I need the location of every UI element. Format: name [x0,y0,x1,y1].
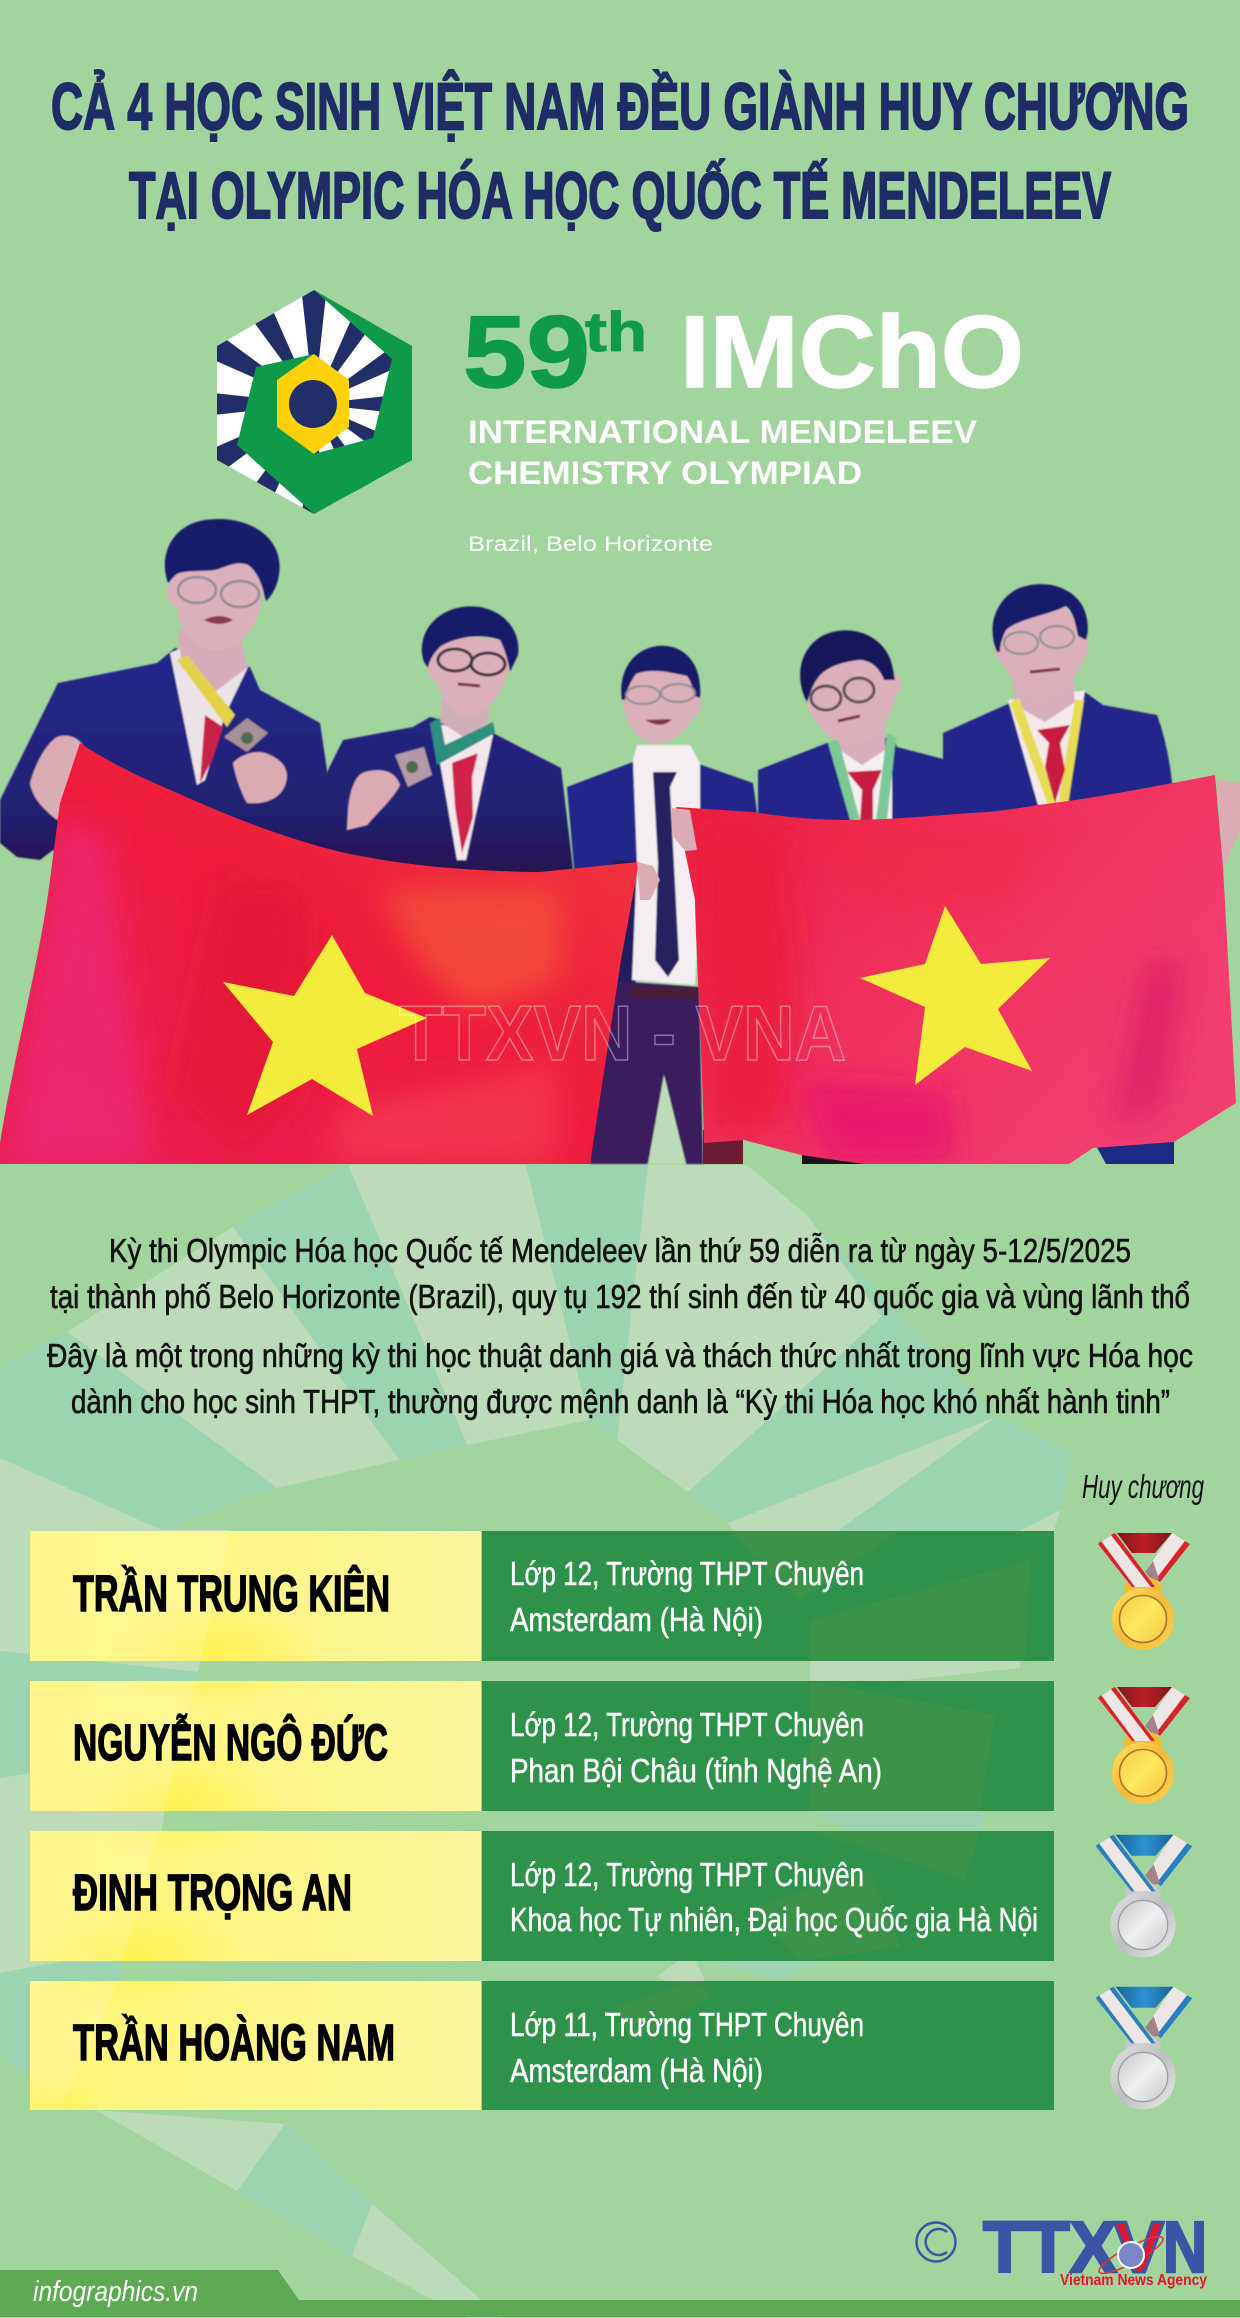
logo subtitle: INTERNATIONAL MENDELEEV [468,414,978,450]
medal held by person 2 [395,747,432,787]
icon: gold medal row 2 [1098,1687,1190,1804]
row 3: Khoa học Tự nhiên, Đại học Quốc gia Hà Nội [510,1901,1038,1938]
row 1: Lớp 12, Trường THPT Chuyên [510,1555,864,1592]
logo text: 59th IMChO: th [585,300,647,363]
hand of person 2 [347,770,400,830]
TTXVN logo: V [1114,2208,1164,2288]
background geometric rays [0,1165,1072,2318]
row 1: Amsterdam (Hà Nội) [510,1601,763,1638]
row 3: Lớp 12, Trường THPT Chuyên [510,1856,864,1893]
icon: copyright mark [916,2222,956,2262]
logo text: 59th IMChO: IMChO [680,295,1024,409]
row 3 [73,1856,1038,1938]
footer site name: infographics.vn [33,2276,198,2308]
hand at right flag, left corner [672,808,697,851]
hand of person 1 [233,752,287,803]
TTXVN logo: TTX [983,2208,1117,2288]
logo subtitle: CHEMISTRY OLYMPIAD [468,455,862,491]
row 4 [73,2006,864,2089]
hand at right flag, right corner [1217,780,1240,865]
row 4: Amsterdam (Hà Nội) [510,2052,763,2089]
logo subtitle [468,414,978,491]
star [223,935,427,1116]
watermark: TTXVN - VNA [399,989,846,1077]
icon: gold medal row 1 [1098,1533,1190,1650]
trousers [590,980,703,1164]
icon: IMChO hexagon logo [217,290,412,514]
row 2: Lớp 12, Trường THPT Chuyên [510,1706,864,1743]
left flag [0,743,639,1164]
icon: silver medal row 3 [1096,1835,1192,1958]
location text: Brazil, Belo Horizonte [468,533,713,556]
person 3 [567,646,757,1164]
TTXVN logo: Vietnam News Agency [1060,2272,1207,2289]
row 4: TRẦN HOÀNG NAM [73,2013,395,2071]
hand at left flag corner [637,862,660,900]
intro paragraph [47,1232,1193,1420]
star [860,906,1050,1085]
row 2: Phan Bội Châu (tỉnh Nghệ An) [510,1752,882,1789]
table rows [0,1531,1054,2143]
row 1 [73,1555,864,1638]
row 2: NGUYỄN NGÔ ĐỨC [73,1713,388,1771]
row 2 [73,1706,882,1789]
person 2 [303,606,575,885]
flag bunch and legs under right flag [703,1130,1174,1164]
row 1: TRẦN TRUNG KIÊN [73,1564,390,1622]
group photo [0,519,1240,1164]
row 4: Lớp 11, Trường THPT Chuyên [510,2006,864,2043]
logo text: 59th IMChO [463,295,1024,409]
row 3: ĐINH TRỌNG AN [73,1864,352,1921]
person 1 [0,519,330,885]
footer bar [0,2270,1240,2317]
person 5 [943,584,1172,830]
medal held by person 1 [224,718,268,752]
person 4 [758,630,970,830]
logo text: 59th IMChO: 59 [463,295,590,409]
hand on flag [30,736,84,820]
TTXVN logo: N [1163,2208,1207,2288]
TTXVN logo [983,2208,1207,2289]
row backgrounds [0,1531,1054,2143]
title [51,69,1189,232]
right flag [676,775,1236,1164]
icon: silver medal row 4 [1096,1987,1192,2110]
